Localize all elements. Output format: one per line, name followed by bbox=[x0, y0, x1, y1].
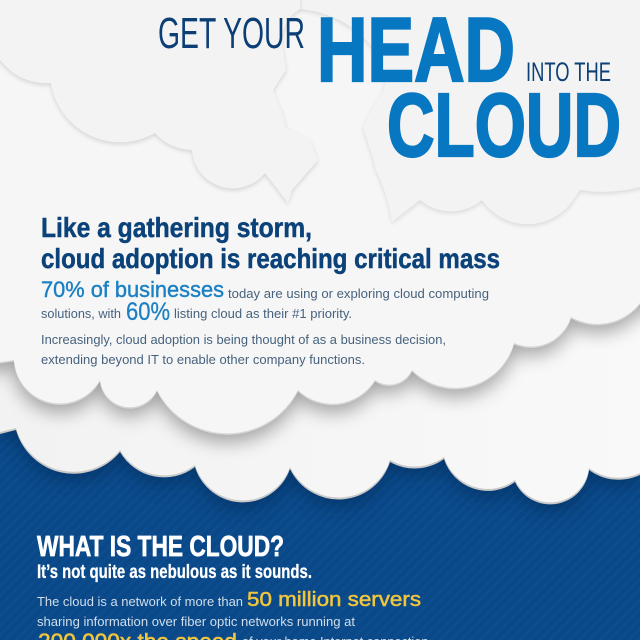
panel: left head cloud bbox=[0, 0, 318, 205]
heading: gathering storm: Like a gathering storm, bbox=[41, 212, 312, 243]
heading: what is the cloud: WHAT IS THE CLOUD? bbox=[37, 531, 284, 563]
text block: adoption statistics: extending beyond IT to enable other company functions. bbox=[41, 353, 365, 367]
text block: adoption statistics: 70% of businesses bbox=[41, 277, 224, 302]
text block: cloud facts: The cloud is a network of more than bbox=[37, 595, 243, 609]
heading: what is the cloud: It’s not quite as nebulous as it sounds. bbox=[37, 562, 312, 583]
panel: blue section background bbox=[0, 420, 640, 640]
title: HEAD bbox=[317, 0, 515, 101]
panel: main text cloud bbox=[0, 0, 640, 442]
text block: adoption statistics: 60% bbox=[126, 298, 170, 326]
title bbox=[158, 0, 621, 176]
text block: adoption statistics: Increasingly, cloud adoption is being thought of as a business decision, bbox=[41, 333, 446, 347]
heading: gathering storm: cloud adoption is reaching critical mass bbox=[41, 243, 500, 274]
text block: adoption statistics: listing cloud as their #1 priority. bbox=[174, 307, 352, 321]
text block: cloud facts: sharing information over fiber optic networks running at bbox=[37, 615, 356, 629]
heading: what is the cloud bbox=[37, 531, 312, 583]
text block: cloud facts: 50 million servers bbox=[247, 589, 421, 611]
text block: adoption statistics: solutions, with bbox=[41, 307, 121, 321]
heading: gathering storm bbox=[41, 212, 500, 274]
text block: adoption statistics: today are using or exploring cloud computing bbox=[228, 287, 489, 301]
panel: lower cloud bbox=[0, 300, 640, 511]
panel: right speech cloud bbox=[290, 0, 640, 226]
text block: cloud facts bbox=[37, 589, 432, 640]
text block: adoption statistics bbox=[41, 277, 489, 367]
title: GET YOUR bbox=[158, 9, 305, 58]
